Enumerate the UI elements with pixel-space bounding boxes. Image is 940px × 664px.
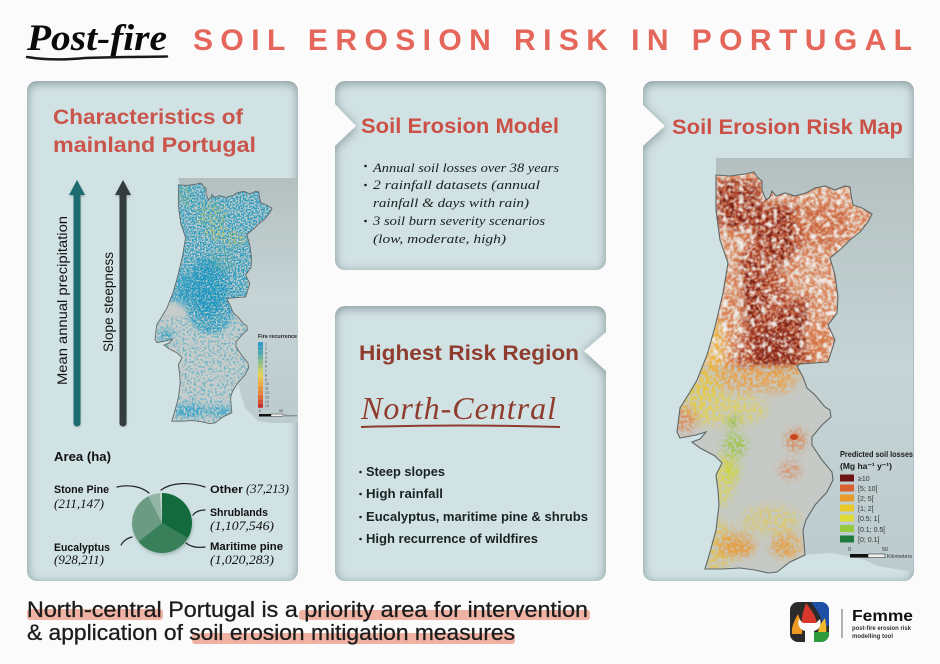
legend: predicted soil losses: [0.1; 0.5[ <box>858 527 885 534</box>
heading: soil erosion risk map: Soil Erosion Risk Map <box>672 116 903 139</box>
callout: conclusion statement: North-central Portugal is a priority area for intervention <box>27 597 588 622</box>
legend: fire recurrence: 0 <box>259 409 261 413</box>
legend: predicted soil losses: Kilometers <box>887 554 913 560</box>
label: stone pine: Stone Pine <box>54 484 109 496</box>
text block: region bullets: High rainfall <box>366 487 443 501</box>
label: shrublands: (1,107,546) <box>210 519 274 533</box>
heading: soil erosion model: Soil Erosion Model <box>361 115 559 138</box>
label: other: (37,213) <box>246 482 289 496</box>
legend: predicted soil losses: [0; 0.1] <box>858 537 879 544</box>
label: eucalyptus: Eucalyptus <box>54 542 110 554</box>
heading: characteristics: Characteristics of <box>53 106 244 129</box>
pie chart: area by land cover <box>132 493 193 555</box>
panel: soil erosion model <box>335 81 606 270</box>
legend: fire recurrence: Fire recurrence <box>258 334 297 340</box>
logo: Femme: modelling tool <box>852 634 893 640</box>
legend: fire recurrence: 5 <box>265 360 267 364</box>
legend: fire recurrence: 14 <box>265 400 269 404</box>
legend: fire recurrence: 12 <box>265 391 269 395</box>
heading: area: Area (ha) <box>54 449 111 464</box>
legend: predicted soil losses: Predicted soil losses <box>840 449 913 459</box>
text block: region bullets <box>359 465 588 546</box>
label: eucalyptus <box>54 537 132 567</box>
label: other <box>161 482 289 496</box>
legend: predicted soil losses: [0.5; 1[ <box>858 516 879 523</box>
logo: Femme: Femme <box>852 608 913 625</box>
legend: fire recurrence: 7 <box>265 369 267 373</box>
map: predicted soil losses <box>670 158 913 573</box>
text block: model bullets <box>364 160 559 246</box>
arrow: mean annual precipitation: Mean annual precipitation <box>55 216 70 385</box>
label: stone pine: (211,147) <box>54 497 104 511</box>
label: eucalyptus: (928,211) <box>54 553 104 567</box>
label: maritime pine: Maritime pine <box>210 541 283 553</box>
heading: highest risk region: Highest Risk Region <box>359 342 579 365</box>
arrow: mean annual precipitation <box>55 180 86 426</box>
legend: predicted soil losses: [2; 5[ <box>858 496 874 503</box>
legend: fire recurrence: 1 <box>265 342 267 346</box>
legend: fire recurrence <box>258 334 297 418</box>
heading: characteristics: mainland Portugal <box>53 134 256 157</box>
legend: predicted soil losses: ≥10 <box>858 476 870 483</box>
legend: fire recurrence: Kilometers <box>284 414 297 418</box>
legend: fire recurrence: 13 <box>265 395 269 399</box>
panel: soil erosion risk map <box>643 81 914 581</box>
label: stone pine <box>54 484 149 511</box>
legend: predicted soil losses: 50 <box>882 547 888 553</box>
label: maritime pine: (1,020,283) <box>210 553 274 567</box>
text block: model bullets: 3 soil burn severity scenarios <box>372 213 545 228</box>
legend: fire recurrence: 15 <box>265 404 269 408</box>
legend: fire recurrence: 8 <box>265 373 267 377</box>
text block: model bullets: Annual soil losses over 38 years <box>372 160 559 175</box>
arrow: slope steepness <box>101 180 132 426</box>
legend: predicted soil losses: [1; 2[ <box>858 506 874 513</box>
title <box>26 18 912 59</box>
heading: characteristics <box>53 106 256 157</box>
legend: fire recurrence: 3 <box>265 351 267 355</box>
logo: Femme: post-fire erosion risk <box>852 626 912 632</box>
text block: region bullets: Steep slopes <box>366 465 445 479</box>
legend: predicted soil losses <box>840 449 913 560</box>
legend: fire recurrence: 2 <box>265 347 267 351</box>
text block: region bullets: High recurrence of wildfires <box>366 532 538 546</box>
title: handwritten Post-fire: Post-fire <box>26 18 167 59</box>
highlights behind key phrases <box>27 609 590 644</box>
icon: Femme flame and wrench <box>790 602 829 642</box>
arrow: slope steepness: Slope steepness <box>101 252 116 352</box>
legend: predicted soil losses: 0 <box>848 547 851 553</box>
label: maritime pine <box>186 541 283 567</box>
callout: conclusion statement: & application of soil erosion mitigation measures <box>27 620 515 645</box>
legend: predicted soil losses: (Mg ha⁻¹ y⁻¹) <box>840 461 892 471</box>
map: fire recurrence <box>155 178 298 425</box>
text block: model bullets: 2 rainfall datasets (annual <box>373 177 540 192</box>
legend: fire recurrence: 6 <box>265 365 267 369</box>
text block: model bullets: rainfall & days with rain) <box>373 195 529 210</box>
panel: highest risk region <box>335 306 606 581</box>
legend: fire recurrence: 50 <box>279 409 283 413</box>
legend: predicted soil losses: [5; 10[ <box>858 486 878 493</box>
legend: fire recurrence: 11 <box>265 387 269 391</box>
heading: north-central: North-Central <box>360 390 556 426</box>
legend: fire recurrence: 10 <box>265 382 269 386</box>
label: other: Other <box>210 484 244 496</box>
panel: characteristics of mainland Portugal <box>27 81 298 581</box>
text block: region bullets: Eucalyptus, maritime pine & shrubs <box>366 510 588 524</box>
legend: fire recurrence: 9 <box>265 378 267 382</box>
title: main heading: SOIL EROSION RISK IN PORTUGAL <box>193 24 912 57</box>
label: shrublands: Shrublands <box>210 507 268 519</box>
callout: conclusion statement <box>27 597 590 645</box>
label: shrublands <box>193 507 274 533</box>
text block: model bullets: (low, moderate, high) <box>373 231 506 246</box>
logo: Femme <box>790 602 913 642</box>
legend: fire recurrence: 4 <box>265 356 267 360</box>
